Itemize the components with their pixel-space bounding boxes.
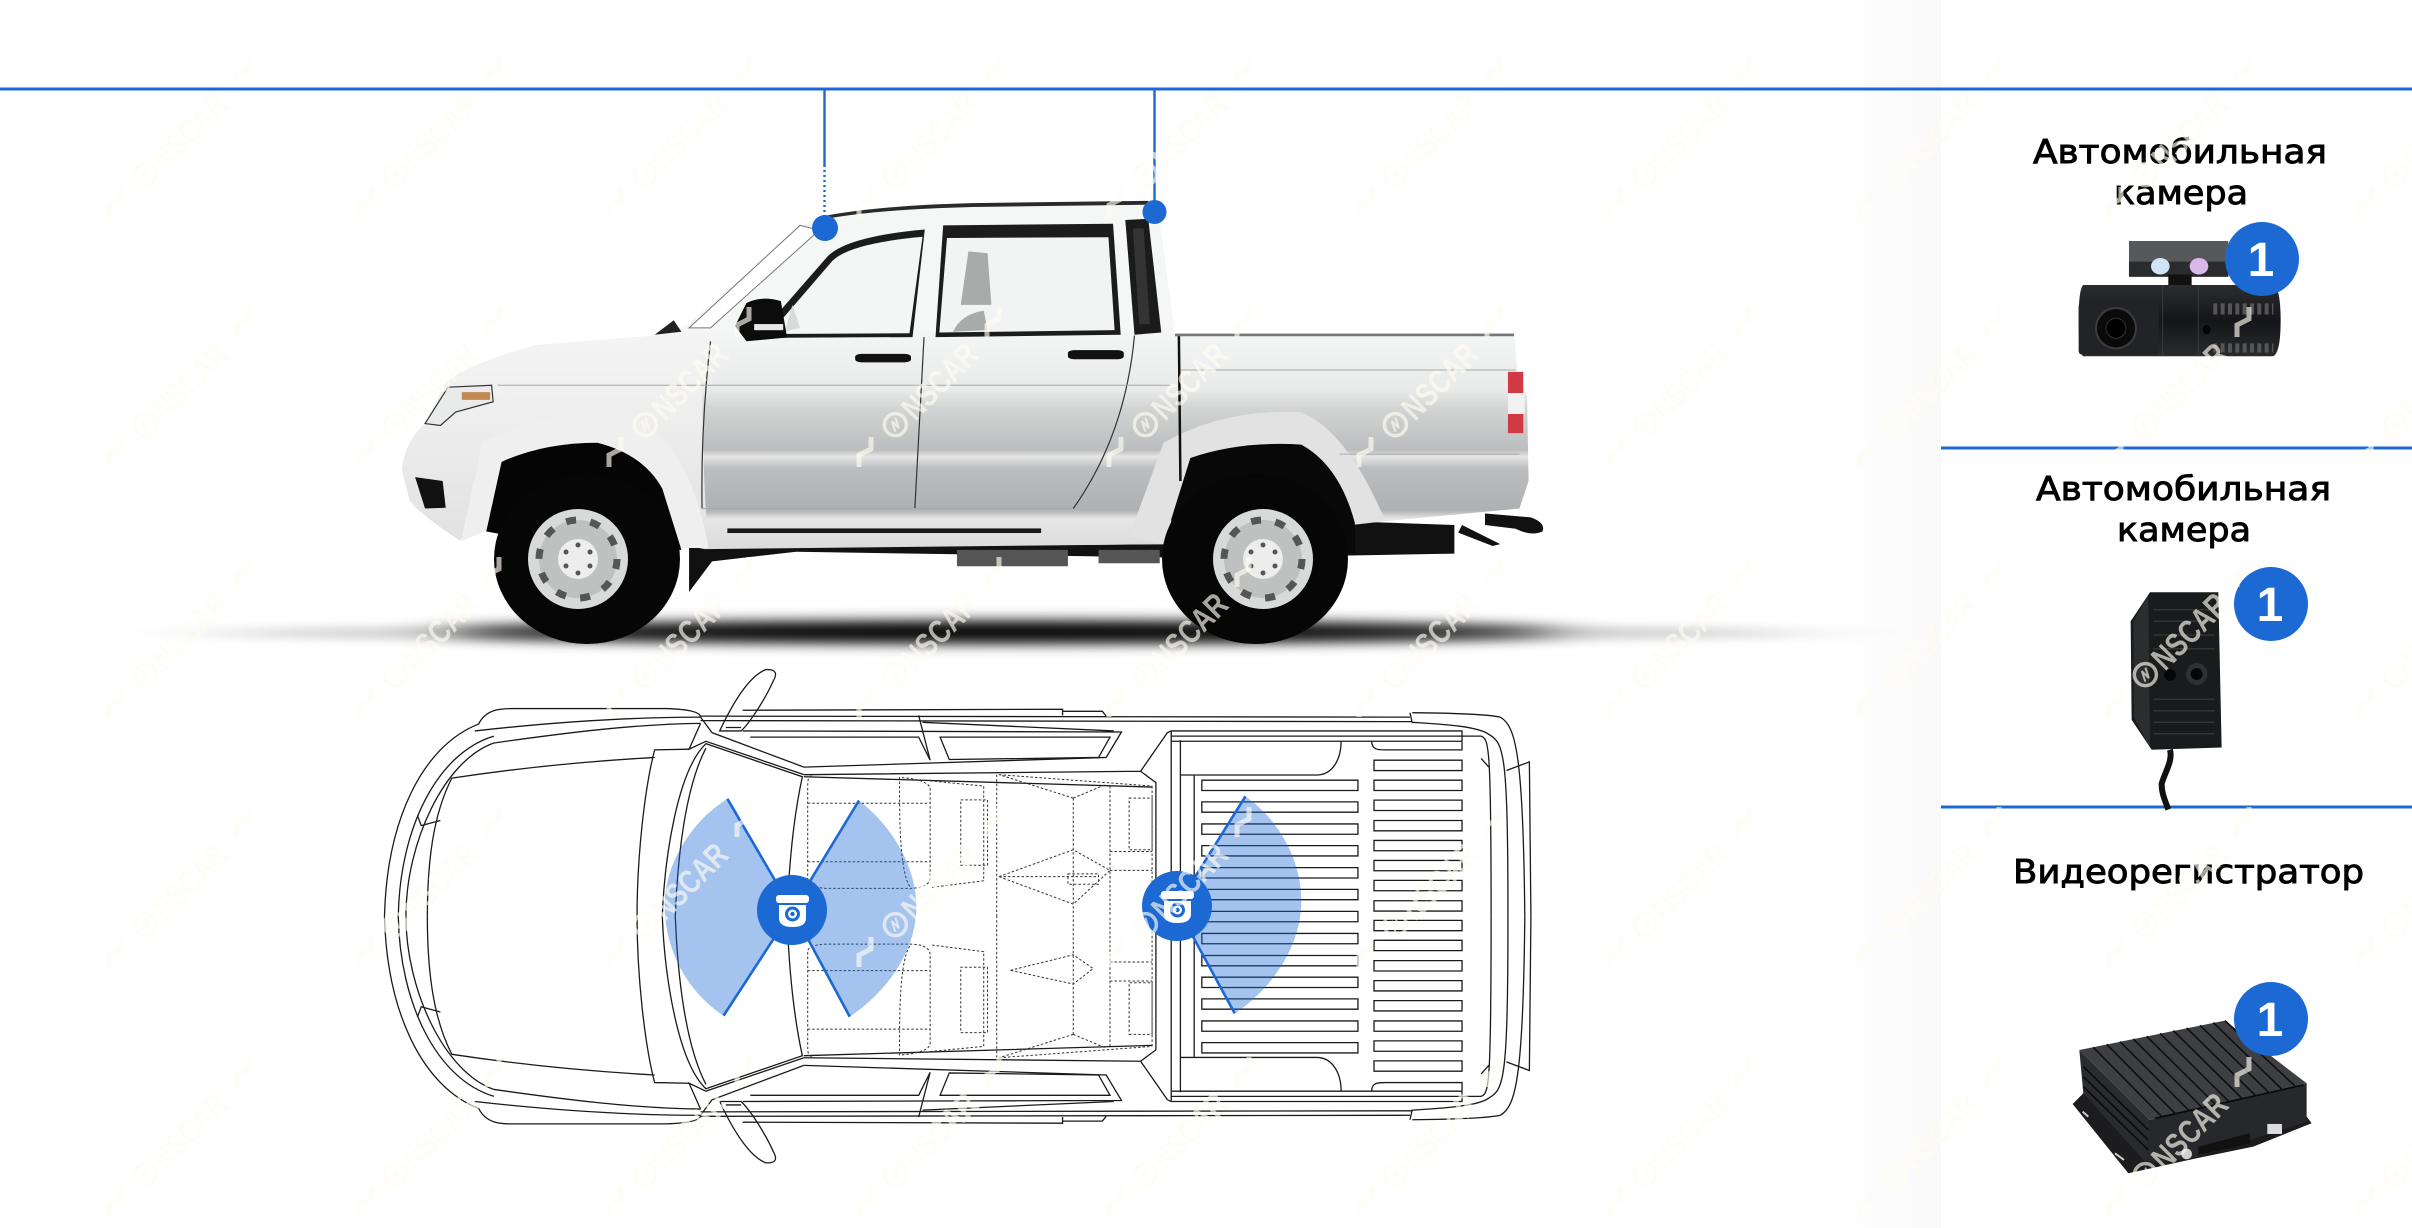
badge: quantity 1: 1 bbox=[2257, 994, 2283, 1047]
heading: box camera: Автомобильная bbox=[2036, 469, 2331, 508]
cone: front camera cabin bbox=[792, 801, 916, 1017]
icon: rear dome camera bbox=[1142, 871, 1212, 941]
truck body bbox=[402, 201, 1543, 592]
top blue line bbox=[0, 88, 2412, 90]
heading: DVR: Видеорегистратор bbox=[2013, 852, 2364, 891]
badge: quantity 1 bbox=[2225, 222, 2299, 296]
heading: dashcam: камера bbox=[2114, 173, 2248, 212]
hood and front fender bbox=[402, 336, 708, 548]
fog light bbox=[415, 477, 446, 509]
roof rail bbox=[825, 201, 1148, 218]
side view truck bbox=[402, 201, 1543, 644]
badge: quantity 1: 1 bbox=[2248, 234, 2274, 287]
tail light bbox=[1508, 372, 1523, 433]
background shade beside panel bbox=[1830, 0, 1941, 1228]
callout: front camera marker bbox=[812, 90, 838, 241]
mirror bbox=[735, 299, 787, 341]
headlight bbox=[425, 385, 493, 425]
badge: quantity 1 bbox=[2234, 982, 2308, 1056]
cone: rear camera bbox=[1177, 796, 1301, 1013]
front wheel bbox=[494, 474, 680, 644]
ground shadow bbox=[210, 621, 1810, 643]
callout: rear camera marker bbox=[1142, 90, 1166, 224]
icon: DVR photo bbox=[2073, 1021, 2312, 1173]
heading: box camera: камера bbox=[2117, 510, 2251, 549]
icon: dashcam photo bbox=[2079, 241, 2281, 356]
cone: front camera forward bbox=[665, 799, 792, 1016]
top view truck outline bbox=[384, 670, 1531, 1163]
panel lines bbox=[702, 336, 1134, 509]
windows and pillar bbox=[1125, 219, 1161, 335]
badge: quantity 1: 1 bbox=[2257, 579, 2283, 632]
icon: front dome camera bbox=[757, 875, 827, 945]
panel: equipment list bbox=[1941, 0, 2412, 1228]
rear wheel bbox=[1162, 474, 1348, 644]
icon: box camera photo bbox=[2131, 592, 2222, 809]
camera view cones bbox=[665, 796, 1301, 1017]
heading: dashcam: Автомобильная bbox=[2033, 132, 2327, 171]
badge: quantity 1 bbox=[2234, 567, 2308, 641]
handles bbox=[855, 354, 911, 362]
